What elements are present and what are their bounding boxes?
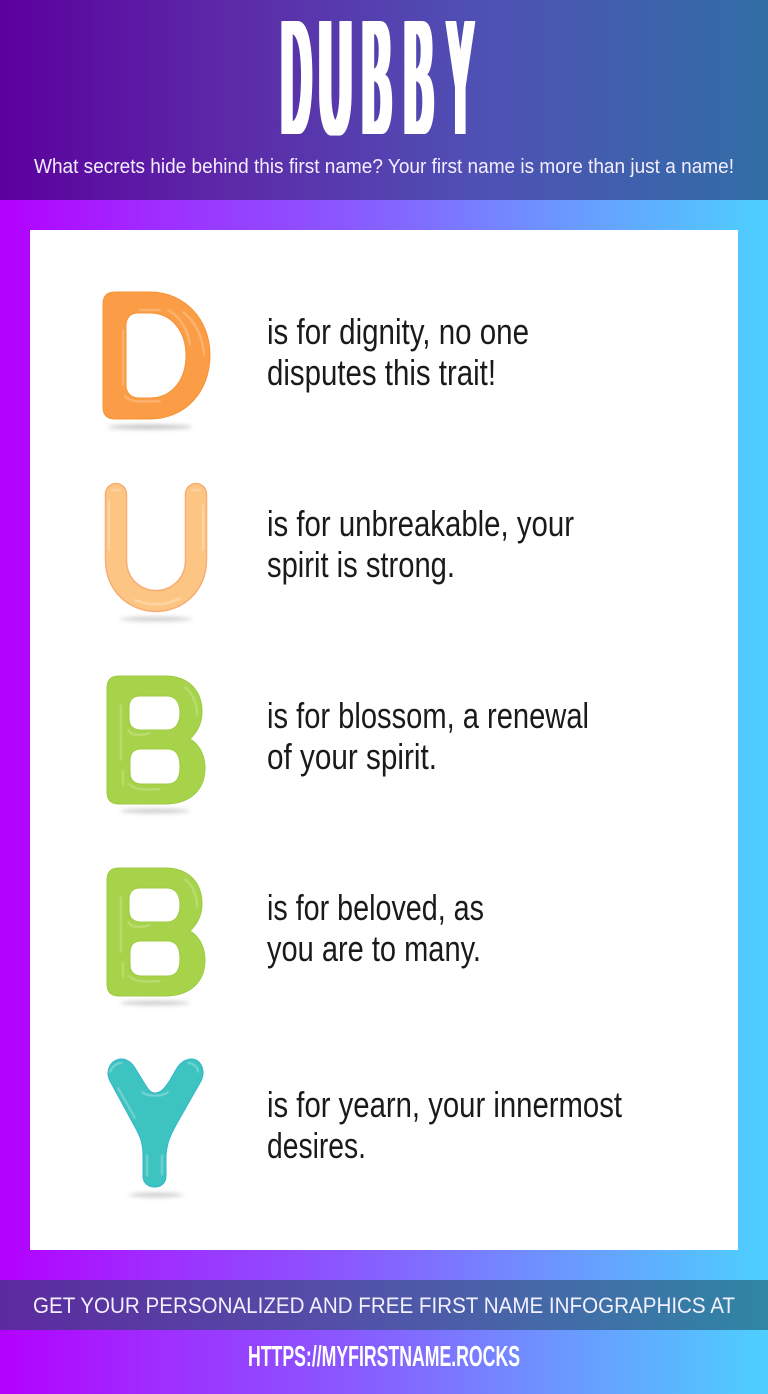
- text: D line: is for dignity, no one: [267, 311, 529, 352]
- footer text: GET YOUR PERSONALIZED AND FREE FIRST NAME INFOGRAPHICS AT: [33, 1293, 735, 1318]
- text: second B line: is for beloved, as: [267, 887, 484, 928]
- text: second B line: you are to many.: [267, 928, 481, 969]
- icon: letter B: [107, 676, 205, 813]
- text: U line: is for unbreakable, your: [267, 503, 574, 544]
- text: B line: [267, 695, 589, 777]
- text: Y line: desires.: [267, 1125, 366, 1166]
- icon: letter U: [109, 490, 203, 621]
- text: D line: disputes this trait!: [267, 352, 496, 393]
- panel: letters: [30, 230, 738, 1250]
- text: B line: is for blossom, a renewal: [267, 695, 589, 736]
- text: B line: of your spirit.: [267, 736, 437, 777]
- subtitle: What secrets hide behind this first name? Your first name is more than just a name!: [34, 156, 734, 178]
- icon: letter Y: [108, 1059, 203, 1197]
- text: second B line: [267, 887, 484, 969]
- header band: [0, 0, 768, 200]
- text: U line: spirit is strong.: [267, 544, 455, 585]
- footer url: HTTPS://MYFIRSTNAME.ROCKS: [248, 1341, 520, 1373]
- icon: letter D: [103, 292, 210, 429]
- title: [281, 0, 476, 169]
- text: Y line: [267, 1084, 622, 1166]
- text: U line: [267, 503, 574, 585]
- icon: letter B second: [107, 868, 205, 1005]
- text: Y line: is for yearn, your innermost: [267, 1084, 622, 1125]
- footer band: [0, 1280, 768, 1330]
- text: D line: [267, 311, 529, 393]
